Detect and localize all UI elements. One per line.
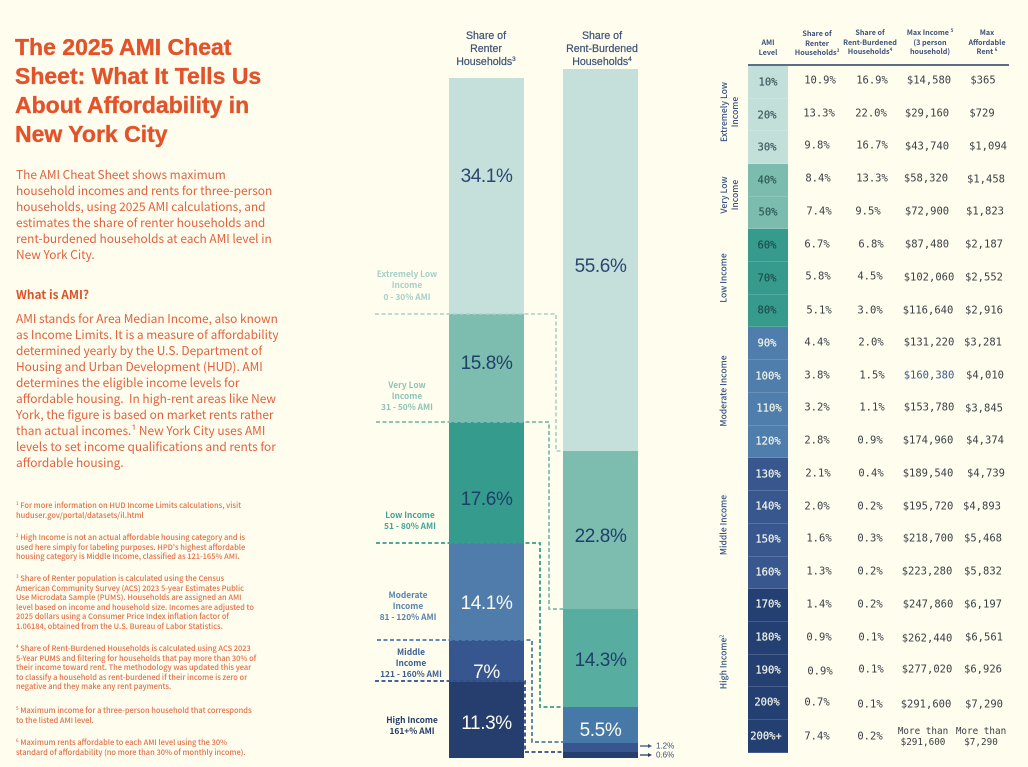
segment: middle 1.2% bbox=[563, 743, 638, 752]
label: very low income: Income bbox=[392, 390, 422, 402]
row 150%: $5,468 bbox=[964, 532, 1002, 544]
segment: extremely low 34.1% bbox=[449, 78, 524, 314]
side label: extremely low income: Income bbox=[729, 97, 741, 127]
row 130%: 2.1% bbox=[805, 468, 831, 480]
row 190% bbox=[748, 655, 1002, 687]
row 200%: $291,600 bbox=[901, 698, 951, 710]
row 190%: $6,926 bbox=[964, 664, 1002, 676]
label: low income: 51 - 80% AMI bbox=[384, 520, 436, 532]
label: very low income: 31 - 50% AMI bbox=[381, 401, 433, 413]
row 200%: 0.1% bbox=[857, 698, 883, 710]
column heading: rent-burdened households: Share of bbox=[582, 30, 622, 42]
row 90%: 2.0% bbox=[858, 336, 884, 348]
header: max affordable rent: Max bbox=[980, 28, 994, 38]
text block: AMI explanation bbox=[16, 310, 279, 471]
footnote 3 bbox=[16, 573, 254, 632]
heading: what is AMI: What is AMI? bbox=[16, 286, 89, 303]
row 100%: 3.8% bbox=[804, 370, 830, 382]
footnote 1 bbox=[16, 500, 241, 521]
segment: middle 7% bbox=[449, 640, 524, 683]
row 170%: 1.4% bbox=[806, 598, 832, 610]
bar: share of rent-burdened households bbox=[563, 69, 638, 758]
header: share of rent-burdened households: Rent-Burdened bbox=[843, 38, 897, 48]
row 70%: 70% bbox=[758, 272, 776, 284]
row 160%: 1.3% bbox=[806, 566, 832, 578]
row 80%: $2,916 bbox=[965, 304, 1003, 316]
title: The 2025 AMI Cheat bbox=[15, 34, 231, 60]
row 90%: 90% bbox=[758, 338, 776, 350]
footnote 6 bbox=[16, 737, 246, 758]
column heading: renter households: Share of bbox=[466, 30, 506, 42]
side label: very low income: Very Low bbox=[718, 176, 730, 214]
segment: low 17.6%: 17.6% bbox=[461, 489, 513, 510]
intro text block: rent-burdened households at each AMI level in bbox=[16, 230, 272, 247]
row 80%: 3.0% bbox=[857, 304, 883, 316]
header: max affordable rent: Rent 6 bbox=[977, 47, 997, 57]
row 120%: 120% bbox=[755, 436, 781, 448]
footnote 5: 5 Maximum income for a three-person household that corresponds bbox=[16, 705, 252, 716]
label: middle income: Middle bbox=[397, 646, 425, 658]
segment: very low 22.8% bbox=[563, 451, 638, 609]
row 180%: 0.9% bbox=[806, 632, 832, 644]
row 20% bbox=[748, 99, 995, 131]
row 100%: 1.5% bbox=[859, 370, 885, 382]
row 20%: $29,160 bbox=[905, 108, 949, 120]
label: extremely low income bbox=[377, 268, 437, 303]
column heading: renter households: Renter bbox=[470, 43, 502, 55]
row 30%: 16.7% bbox=[856, 140, 888, 152]
row 100%: $4,010 bbox=[966, 370, 1004, 382]
row 70%: 5.8% bbox=[805, 270, 831, 282]
segment: high 11.3%: 11.3% bbox=[461, 713, 512, 734]
segment: extremely low 55.6% bbox=[563, 69, 638, 451]
header: share of renter households: Renter bbox=[805, 39, 829, 49]
label: moderate income bbox=[380, 589, 436, 623]
header: AMI level: Level bbox=[759, 48, 777, 58]
row 50%: 7.4% bbox=[806, 206, 832, 218]
row 170%: $6,197 bbox=[964, 598, 1002, 610]
label: high income: High Income bbox=[386, 714, 438, 726]
row 70%: 4.5% bbox=[857, 270, 883, 282]
label: moderate income: Moderate bbox=[388, 589, 428, 601]
row 10%: 10.9% bbox=[804, 74, 836, 86]
row 190%: $277,020 bbox=[902, 664, 952, 676]
row 200%+ bbox=[748, 720, 1009, 753]
intro text block: New York City. bbox=[16, 246, 95, 263]
segment: moderate 14.1% bbox=[449, 543, 524, 640]
row 40%: 13.3% bbox=[856, 172, 888, 184]
segment: moderate 5.5% bbox=[563, 707, 638, 743]
row 110% bbox=[748, 393, 1003, 426]
header: share of renter households bbox=[795, 29, 839, 58]
row 180%: 180% bbox=[755, 632, 781, 644]
label: middle income: Income bbox=[396, 657, 426, 669]
header: max affordable rent bbox=[968, 28, 1006, 57]
row 160%: $5,832 bbox=[964, 566, 1002, 578]
row 20%: 20% bbox=[758, 110, 776, 122]
row 60%: 6.7% bbox=[804, 238, 830, 250]
row 150% bbox=[748, 524, 1002, 557]
footnote 2 bbox=[16, 532, 245, 562]
row 160% bbox=[748, 557, 1002, 589]
side label: extremely low income bbox=[718, 82, 741, 142]
footnote 3: 1.06184, obtained from the U.S. Bureau of Labor Statistics. bbox=[16, 621, 223, 632]
row 200%: $7,290 bbox=[965, 698, 1003, 710]
header: max income: (3 person bbox=[913, 38, 947, 48]
row 190%: 190% bbox=[755, 664, 781, 676]
row 130%: 0.4% bbox=[858, 468, 884, 480]
footnote 4: 4 Share of Rent-Burdened Households is calculated using ACS 2023 bbox=[16, 643, 251, 654]
column heading: rent-burdened households: 4 bbox=[628, 56, 632, 62]
column heading: rent-burdened households bbox=[566, 30, 638, 68]
row 70% bbox=[748, 262, 1003, 295]
row 50%: 50% bbox=[759, 206, 777, 218]
row 100% bbox=[748, 360, 1004, 393]
footnote 3: American Community Survey (ACS) 2023 5-year Estimates Public bbox=[16, 583, 244, 594]
row 140%: 2.0% bbox=[804, 500, 830, 512]
bar: share of renter households bbox=[449, 78, 524, 758]
row 10%: $14,580 bbox=[907, 74, 951, 86]
footnote 5: to the listed AMI level. bbox=[16, 715, 94, 726]
column heading: renter households: Households bbox=[456, 56, 512, 68]
row 40%: $1,458 bbox=[967, 174, 1005, 186]
row 120%: $4,374 bbox=[966, 434, 1004, 446]
row 170%: $247,860 bbox=[903, 598, 953, 610]
side label: very low income: Income bbox=[729, 180, 741, 210]
row 120% bbox=[748, 426, 1004, 458]
footnotes bbox=[16, 500, 256, 758]
row 120%: 2.8% bbox=[804, 434, 830, 446]
footnote 4: 5-Year PUMS and filtering for households that pay more than 30% of bbox=[16, 653, 256, 664]
connector: very low bbox=[376, 422, 563, 609]
side label: low income: Low Income bbox=[718, 253, 730, 303]
footnote 3: Use Microdata Sample (PUMS). Households are assigned an AMI bbox=[16, 592, 242, 603]
row 30%: $43,740 bbox=[905, 140, 949, 152]
label: middle income bbox=[380, 646, 442, 680]
segment: middle 7%: 7% bbox=[473, 662, 500, 683]
side label: extremely low income: Extremely Low bbox=[718, 82, 730, 142]
row 140%: 0.2% bbox=[857, 500, 883, 512]
row 200%: 200% bbox=[754, 696, 780, 708]
text block: AMI explanation: as Income Limits. It is a measure of affordability bbox=[16, 326, 279, 343]
text block: AMI explanation: affordable housing. In high-rent areas like New bbox=[16, 390, 276, 407]
row 50%: 9.5% bbox=[855, 206, 881, 218]
segment: high 0.6% bbox=[563, 752, 638, 758]
title: Sheet: What It Tells Us bbox=[15, 63, 261, 89]
arrow label: 0.6% bbox=[640, 750, 674, 760]
label: extremely low income: Income bbox=[392, 279, 422, 291]
side label: very low income bbox=[718, 176, 741, 214]
row 10%: 16.9% bbox=[856, 74, 888, 86]
footnote 4: to classify a household as rent-burdened if their income is zero or bbox=[16, 672, 247, 683]
row 70%: $2,552 bbox=[965, 272, 1003, 284]
label: low income: Low Income bbox=[385, 509, 435, 521]
title: New York City bbox=[15, 121, 168, 147]
footnote 6: standard of affordability (no more than 30% of monthly income). bbox=[16, 747, 246, 758]
footnote 3: 2025 dollars using a Consumer Price Index inflation factor of bbox=[16, 611, 229, 622]
row 20%: $729 bbox=[969, 108, 995, 120]
header: share of renter households: Households3 bbox=[795, 48, 839, 58]
row 90% bbox=[748, 327, 1002, 360]
AMI data table bbox=[718, 28, 1009, 753]
row 20%: 13.3% bbox=[803, 108, 835, 120]
text block: AMI explanation: determines the eligible income levels for bbox=[16, 374, 240, 391]
text block: AMI explanation: AMI stands for Area Median Income, also known bbox=[16, 310, 278, 327]
label: high income: 161+% AMI bbox=[389, 725, 435, 737]
row 60% bbox=[748, 229, 1003, 262]
footnote 1: 1 For more information on HUD Income Limits calculations, visit bbox=[16, 500, 241, 511]
row 150%: 1.6% bbox=[806, 532, 832, 544]
segment: extremely low 55.6%: 55.6% bbox=[575, 256, 627, 277]
connector: middle bbox=[375, 681, 563, 752]
row 40%: 40% bbox=[758, 174, 776, 186]
row 40%: 8.4% bbox=[805, 172, 831, 184]
segment: low 14.3%: 14.3% bbox=[575, 650, 627, 671]
text block: AMI explanation: determined yearly by the U.S. Department of bbox=[16, 342, 262, 359]
side label: middle income: Middle Income bbox=[718, 495, 730, 555]
row 200%+: 0.2% bbox=[857, 730, 883, 742]
header: share of rent-burdened households: Households4 bbox=[848, 47, 892, 57]
row 200% bbox=[748, 687, 1009, 720]
intro text block: The AMI Cheat Sheet shows maximum bbox=[16, 166, 226, 183]
row 110%: 110% bbox=[756, 402, 782, 414]
title: About Affordability in bbox=[15, 92, 249, 118]
footnote 2: used here simply for labeling purposes. HPD's highest affordable bbox=[16, 542, 245, 553]
row 150%: 150% bbox=[755, 534, 781, 546]
segment: very low 15.8% bbox=[449, 314, 524, 422]
row 190%: 0.1% bbox=[858, 664, 884, 676]
stacked bar chart bbox=[375, 30, 674, 760]
footnote 6: 6 Maximum rents affordable to each AMI level using the 30% bbox=[16, 737, 227, 748]
footnote 4: negative and they make any rent payments. bbox=[16, 681, 171, 692]
row 150%: $218,700 bbox=[903, 532, 953, 544]
row 200%: 0.7% bbox=[804, 696, 830, 708]
header: share of rent-burdened households bbox=[843, 28, 897, 57]
row 80%: $116,640 bbox=[903, 304, 953, 316]
row 30% bbox=[748, 131, 1007, 164]
row 90%: 4.4% bbox=[804, 336, 830, 348]
header: max income bbox=[907, 28, 953, 57]
segment: low 14.3% bbox=[563, 609, 638, 707]
label: middle income: 121 - 160% AMI bbox=[380, 668, 442, 680]
row 110%: $3,845 bbox=[965, 402, 1003, 414]
segment: moderate 14.1%: 14.1% bbox=[461, 593, 513, 614]
row 160%: $223,280 bbox=[902, 566, 952, 578]
row 130%: $189,540 bbox=[903, 468, 953, 480]
segment: very low 15.8%: 15.8% bbox=[461, 353, 513, 374]
arrow label: 0.6%: 0.6% bbox=[656, 750, 674, 760]
title bbox=[15, 34, 261, 148]
row 30%: 9.8% bbox=[804, 140, 830, 152]
side label: high income: High Income2 bbox=[718, 635, 730, 689]
intro text block: households, using 2025 AMI calculations, and bbox=[16, 198, 266, 215]
intro text block: household incomes and rents for three-person bbox=[16, 182, 272, 199]
intro text block bbox=[16, 166, 272, 263]
row 30%: 30% bbox=[758, 142, 776, 154]
row 160%: 160% bbox=[755, 566, 781, 578]
row 200%+: 200%+ bbox=[750, 730, 782, 742]
text block: AMI explanation: Housing and Urban Development (HUD). AMI bbox=[16, 358, 263, 375]
row 140%: $4,893 bbox=[963, 500, 1001, 512]
segment: moderate 5.5%: 5.5% bbox=[580, 720, 622, 741]
arrow label: 1.2%: 1.2% bbox=[656, 742, 674, 750]
table header bbox=[759, 28, 1006, 58]
row 130%: $4,739 bbox=[967, 468, 1005, 480]
footnote 5 bbox=[16, 705, 252, 726]
segment: extremely low 34.1%: 34.1% bbox=[461, 166, 513, 187]
row 10% bbox=[748, 66, 996, 99]
text block: AMI explanation: than actual incomes.¹ New York City uses AMI bbox=[16, 422, 265, 439]
footnote 4: their income toward rent. The methodology was updated this year bbox=[16, 662, 251, 673]
row 170%: 170% bbox=[755, 598, 781, 610]
row 70%: $102,060 bbox=[904, 272, 954, 284]
row 80%: 5.1% bbox=[806, 304, 832, 316]
row 60%: $2,187 bbox=[965, 238, 1003, 250]
segment: very low 22.8%: 22.8% bbox=[575, 526, 627, 547]
label: low income bbox=[384, 509, 436, 532]
row 80% bbox=[748, 295, 1003, 327]
label: moderate income: Income bbox=[393, 600, 423, 612]
row 190%: 0.9% bbox=[807, 666, 833, 678]
row 60%: $87,480 bbox=[905, 238, 949, 250]
footnote 3: 3 Share of Renter population is calculated using the Census bbox=[16, 573, 224, 584]
label: extremely low income: Extremely Low bbox=[377, 268, 437, 280]
row 50% bbox=[748, 197, 1004, 229]
text block: AMI explanation: affordable housing. bbox=[16, 454, 124, 471]
row 120%: 0.9% bbox=[857, 434, 883, 446]
connector: low bbox=[376, 543, 563, 707]
header: AMI level: AMI bbox=[761, 38, 775, 48]
label: moderate income: 81 - 120% AMI bbox=[380, 611, 436, 623]
row 130%: 130% bbox=[755, 468, 781, 480]
intro text block: estimates the share of renter households and bbox=[16, 214, 265, 231]
side label: moderate income: Moderate Income bbox=[718, 355, 730, 427]
label: extremely low income: 0 - 30% AMI bbox=[384, 291, 430, 303]
row 200%+: More than bbox=[898, 726, 948, 737]
segment: high 11.3% bbox=[449, 682, 524, 758]
row 170%: 0.2% bbox=[857, 598, 883, 610]
label: very low income: Very Low bbox=[387, 379, 426, 391]
row 60%: 60% bbox=[758, 240, 776, 252]
row 100%: $160,380 bbox=[904, 370, 954, 382]
row 130% bbox=[748, 458, 1005, 491]
header: max income: household) bbox=[910, 47, 950, 57]
footnote 2: housing category is Middle Income, classified as 121-165% AMI. bbox=[16, 551, 240, 562]
footnote 3: level based on income and household size. Incomes are adjusted to bbox=[16, 602, 254, 613]
row 40% bbox=[748, 164, 1005, 197]
row 200%+: More than bbox=[956, 726, 1006, 737]
row 180%: 0.1% bbox=[858, 632, 884, 644]
text block: AMI explanation: levels to set income qualifications and rents for bbox=[16, 438, 276, 455]
row 180% bbox=[748, 622, 1003, 655]
row 180%: $6,561 bbox=[965, 632, 1003, 644]
row 200%+: 7.4% bbox=[804, 730, 830, 742]
row 60%: 6.8% bbox=[858, 238, 884, 250]
arrow label: 1.2% bbox=[640, 742, 674, 750]
row 120%: $174,960 bbox=[903, 434, 953, 446]
column heading: renter households: 3 bbox=[512, 56, 516, 62]
text block: AMI explanation: York, the figure is based on market rents rather bbox=[16, 406, 274, 423]
header: max income: Max Income 5 bbox=[907, 28, 953, 38]
row 180%: $262,440 bbox=[902, 632, 952, 644]
header: max affordable rent: Affordable bbox=[968, 38, 1006, 48]
label: very low income bbox=[381, 379, 433, 413]
column heading: rent-burdened households: Rent-Burdened bbox=[566, 43, 638, 55]
row 200%+: $7,290 bbox=[964, 737, 998, 748]
row 50%: $1,823 bbox=[966, 206, 1004, 218]
footnote 1: huduser.gov/portal/datasets/il.html bbox=[16, 510, 144, 521]
row 50%: $72,900 bbox=[905, 206, 949, 218]
column heading: rent-burdened households: Households bbox=[572, 56, 628, 68]
footnote 4 bbox=[16, 643, 256, 692]
footnote 2: 2 High Income is not an actual affordable housing category and is bbox=[16, 532, 245, 543]
row 80%: 80% bbox=[758, 304, 776, 316]
connector: moderate bbox=[377, 640, 563, 742]
row 10%: 10% bbox=[759, 76, 777, 88]
connector: extremely low bbox=[375, 314, 563, 451]
row 170% bbox=[748, 589, 1002, 622]
row 110%: $153,780 bbox=[904, 402, 954, 414]
row 140% bbox=[748, 491, 1001, 524]
column heading: renter households bbox=[456, 30, 516, 68]
row 140%: 140% bbox=[755, 500, 781, 512]
row 110%: 3.2% bbox=[804, 402, 830, 414]
header: share of rent-burdened households: Share of bbox=[855, 28, 885, 38]
row 140%: $195,720 bbox=[903, 500, 953, 512]
row 90%: $3,281 bbox=[964, 336, 1002, 348]
segment: low 17.6% bbox=[449, 422, 524, 543]
row 20%: 22.0% bbox=[855, 108, 887, 120]
row 10%: $365 bbox=[970, 74, 996, 86]
row 200%+: $291,600 bbox=[901, 737, 945, 748]
header: share of renter households: Share of bbox=[802, 29, 832, 39]
row 40%: $58,320 bbox=[904, 172, 948, 184]
row 100%: 100% bbox=[755, 370, 781, 382]
row 90%: $131,220 bbox=[904, 336, 954, 348]
row 110%: 1.1% bbox=[859, 402, 885, 414]
label: high income bbox=[386, 714, 438, 737]
row 30%: $1,094 bbox=[969, 140, 1007, 152]
row 150%: 0.3% bbox=[857, 532, 883, 544]
row 160%: 0.2% bbox=[857, 566, 883, 578]
header: AMI level bbox=[759, 38, 778, 58]
